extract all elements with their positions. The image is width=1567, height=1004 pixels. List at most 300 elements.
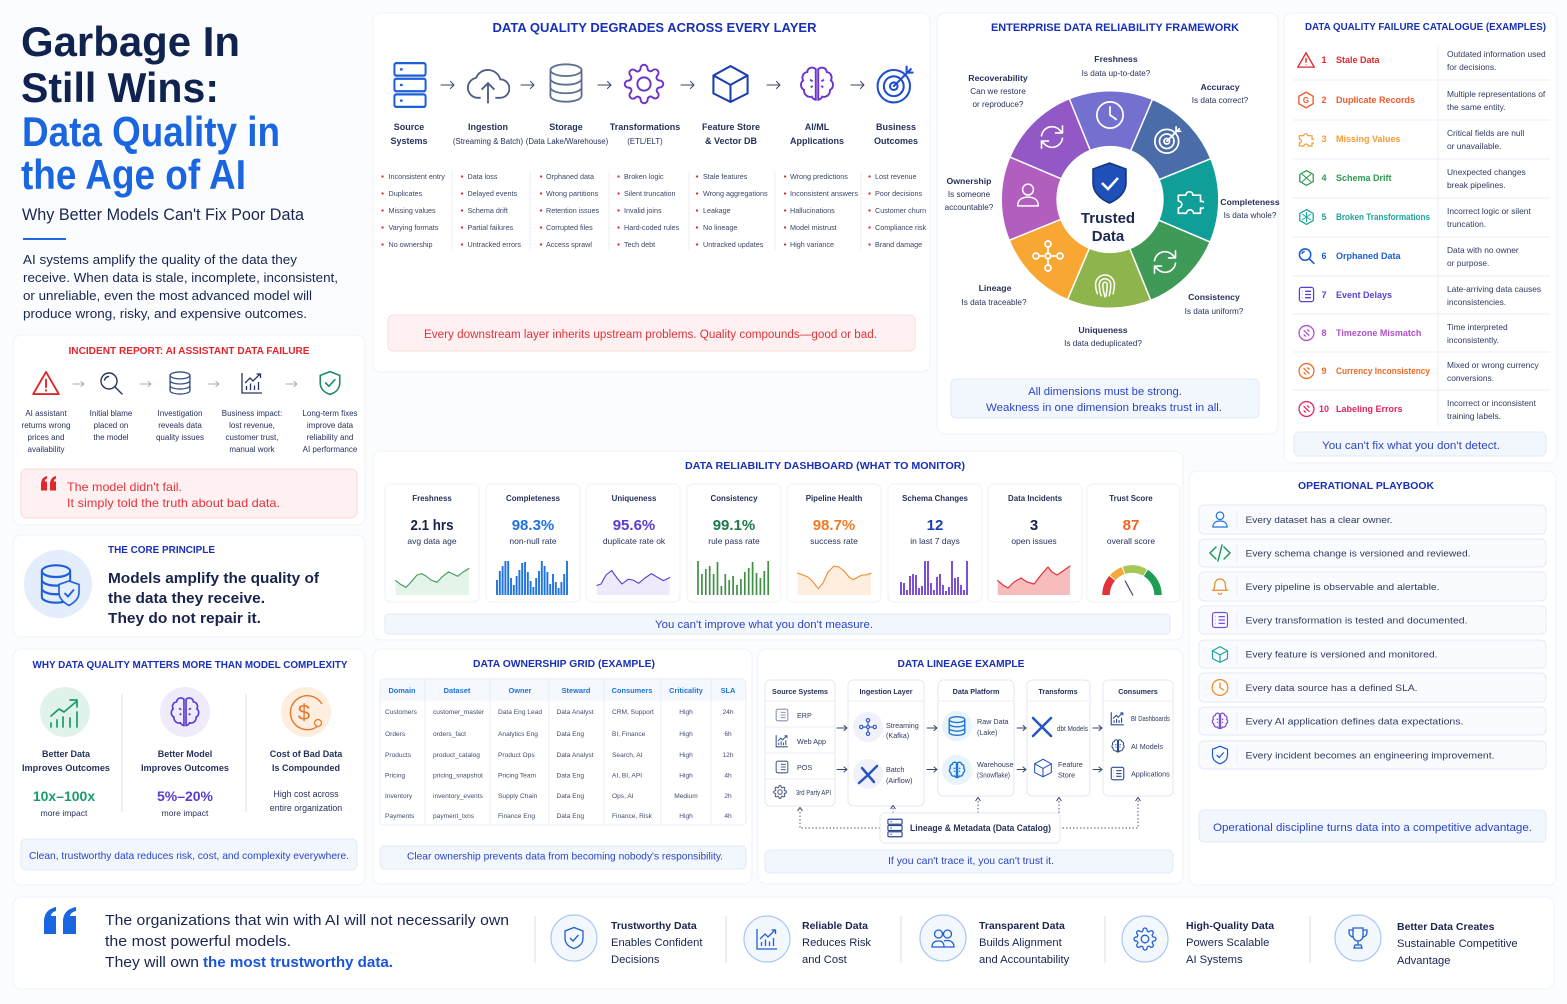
- wheel: [1001, 91, 1219, 308]
- callout: [388, 315, 915, 351]
- callout: quote: It simply told the truth about bad data.: [67, 496, 280, 510]
- column: ingestion layer: (Airflow): [886, 776, 912, 785]
- column: better model: Better Model: [158, 749, 212, 759]
- column: source systems: Web App: [797, 737, 826, 746]
- dimension labels: Is data correct?: [1192, 96, 1249, 105]
- layer labels: Business: [876, 122, 916, 132]
- table: Data Eng: [556, 731, 584, 738]
- row: owner: [1199, 505, 1546, 534]
- layer labels: Systems: [390, 136, 428, 146]
- list: AI/ML issues: High variance: [790, 240, 834, 249]
- KPI: freshness: [385, 484, 479, 602]
- table: Criticality: [669, 686, 704, 695]
- callout: [951, 379, 1259, 418]
- table: Pricing: [385, 772, 405, 780]
- column: better model: 5%–20%: [157, 788, 214, 804]
- step captions: reveals data: [158, 421, 202, 430]
- dimension labels: Freshness: [1094, 54, 1138, 64]
- step captions: [22, 409, 358, 454]
- column: data platform: Data Platform: [953, 687, 999, 696]
- step captions: returns wrong: [22, 421, 70, 430]
- table: High: [679, 813, 693, 820]
- column: better data: more impact: [41, 808, 88, 818]
- step captions: the model: [93, 433, 129, 442]
- heading: DATA LINEAGE EXAMPLE: [898, 658, 1024, 670]
- table: Data Eng: [556, 813, 584, 820]
- row 5: broken transformations: Broken Transformations: [1336, 212, 1430, 222]
- step captions: reliability and: [307, 433, 353, 442]
- column: better data: [22, 687, 110, 818]
- column: cost of bad data: [270, 687, 343, 813]
- KPI: uniqueness: 95.6%: [613, 517, 655, 534]
- takeaway: better data creates advantage: [1335, 915, 1518, 967]
- panel: data reliability dashboard: [373, 451, 1183, 640]
- KPI: consistency: rule pass rate: [708, 536, 760, 546]
- takeaway: reliable data: Reliable Data: [802, 920, 868, 932]
- takeaway: better data creates advantage: Sustainable Competitive: [1397, 938, 1518, 950]
- row 8: timezone mismatch: Time interpreted: [1447, 322, 1508, 332]
- KPI: schema changes: Schema Changes: [902, 494, 969, 503]
- heading: INCIDENT REPORT: AI ASSISTANT DATA FAILURE: [68, 345, 310, 357]
- catalog box: [880, 813, 1060, 843]
- column: ingestion layer: Ingestion Layer: [859, 687, 913, 696]
- row: AI application: Every AI application defines data expectations.: [1246, 716, 1464, 728]
- heading: WHY DATA QUALITY MATTERS MORE THAN MODEL COMPLEXITY: [32, 659, 348, 671]
- row: SLA: [1199, 673, 1546, 702]
- step captions: improve data: [307, 421, 354, 430]
- column: cost of bad data: $: [298, 700, 310, 725]
- table: Product Ops: [498, 752, 535, 759]
- list: storage issues: Retention issues: [546, 206, 600, 215]
- list: source issues: Duplicates: [388, 189, 422, 198]
- flow arrows: [837, 726, 1102, 772]
- KPI: schema changes: in last 7 days: [910, 536, 960, 546]
- layer labels: Transformations: [610, 122, 680, 132]
- heading: OPERATIONAL PLAYBOOK: [1298, 480, 1434, 492]
- row: pipeline: Every pipeline is observable and alertable.: [1246, 582, 1440, 593]
- KPI: freshness: 2.1 hrs: [410, 517, 454, 534]
- dimension labels: Uniqueness: [1078, 325, 1128, 335]
- row 3: missing values: 3: [1321, 134, 1327, 144]
- heading: DATA RELIABILITY DASHBOARD (WHAT TO MONITOR): [685, 460, 965, 472]
- table: 12h: [722, 752, 734, 759]
- KPI: data incidents: [988, 484, 1082, 602]
- list: transformation issues: [618, 172, 680, 249]
- dimension labels: Consistency: [1188, 292, 1240, 302]
- icon: warning: [33, 372, 59, 394]
- callout: Every downstream layer inherits upstream problems. Quality compounds—good or bad.: [424, 329, 877, 341]
- column: cost of bad data: Cost of Bad Data: [270, 749, 343, 759]
- takeaway: trustworthy data: Trustworthy Data: [611, 920, 697, 932]
- row 7: event delays: Late-arriving data causes: [1447, 284, 1541, 294]
- panel: closing banner: [13, 897, 1554, 989]
- closing quote: [105, 912, 509, 971]
- column: data platform: (Snowflake): [977, 770, 1010, 780]
- dimension labels: Can we restore: [970, 87, 1026, 96]
- list: ingestion issues: Data loss: [468, 172, 498, 181]
- row 6: orphaned data: 6: [1321, 251, 1327, 261]
- column: source systems: 3rd Party API: [796, 788, 831, 797]
- table: Payments: [385, 813, 415, 820]
- closing quote: the most trustworthy data.: [203, 954, 393, 971]
- row: transformation: [1199, 606, 1546, 634]
- list: ingestion issues: Untracked errors: [468, 240, 521, 249]
- layer labels: (ETL/ELT): [627, 137, 663, 146]
- column: source systems: Source Systems: [772, 687, 828, 696]
- icon: feature store cube: [713, 66, 748, 103]
- takeaway: reliable data: [744, 916, 871, 966]
- callout: Clean, trustworthy data reduces risk, cost, and complexity everywhere.: [29, 851, 349, 862]
- list: transformation issues: Silent truncation: [624, 189, 676, 198]
- column: cost of bad data: Is Compounded: [272, 763, 340, 773]
- row 1: stale data: Stale Data: [1336, 55, 1381, 65]
- row 7: event delays: inconsistencies.: [1447, 297, 1506, 307]
- row: SLA: Every data source has a defined SLA.: [1246, 683, 1418, 694]
- column: source systems: ERP: [797, 711, 812, 720]
- step captions: Long-term fixes: [302, 409, 358, 418]
- list: feature store issues: Stale features: [703, 172, 748, 181]
- KPI: consistency: Consistency: [711, 494, 758, 503]
- column: transforms: Feature: [1058, 760, 1083, 769]
- takeaway: trustworthy data: Enables Confident: [611, 937, 703, 949]
- panel: enterprise data reliability framework: [937, 13, 1280, 434]
- callout: quote: [21, 469, 357, 518]
- table: High: [679, 709, 693, 716]
- dimension labels: or reproduce?: [973, 100, 1024, 109]
- takeaway: transparent data: and Accountability: [979, 954, 1070, 966]
- column: cost of bad data: entire organization: [270, 803, 342, 813]
- list: source issues: Missing values: [388, 206, 436, 215]
- row 7: event delays: 7: [1321, 290, 1327, 300]
- row 7: event delays: Event Delays: [1336, 290, 1392, 300]
- row: schema: [1199, 539, 1546, 567]
- row 4: schema drift: 4: [1321, 173, 1327, 183]
- principle statement: the data they receive.: [108, 590, 265, 607]
- step captions: manual work: [229, 445, 276, 454]
- table: payment_txns: [433, 813, 475, 820]
- KPI: schema changes: [888, 484, 982, 602]
- icon: storage: [550, 64, 582, 102]
- KPI: consistency: 99.1%: [713, 517, 755, 534]
- row: incident: [1199, 741, 1546, 769]
- row 10: labeling errors: Incorrect or inconsistent: [1447, 398, 1537, 408]
- KPI: completeness: [486, 484, 580, 602]
- step captions: placed on: [94, 421, 128, 430]
- takeaway: high-quality data: AI Systems: [1186, 954, 1243, 966]
- table: pricing_snapshot: [433, 772, 483, 780]
- table: Consumers: [612, 686, 652, 695]
- table: Pricing Team: [498, 772, 536, 780]
- KPI: uniqueness: [586, 484, 680, 602]
- table: High: [679, 772, 693, 780]
- closing quote: the most powerful models.: [105, 933, 291, 950]
- row: pipeline: [1199, 572, 1546, 601]
- list: ingestion issues: Partial failures: [468, 223, 513, 232]
- closing quote: They will own: [105, 954, 199, 971]
- table: [380, 679, 746, 825]
- row 1: stale data: [1298, 49, 1546, 72]
- arrows: [441, 82, 864, 88]
- takeaway: high-quality data: [1122, 916, 1274, 966]
- row 2: duplicate records: G: [1303, 96, 1309, 105]
- column: consumers: [1103, 680, 1173, 796]
- intro paragraph: or unreliable, even the most advanced model will: [23, 288, 312, 303]
- row 6: orphaned data: or purpose.: [1447, 258, 1489, 268]
- takeaway: high-quality data: Powers Scalable: [1186, 937, 1269, 949]
- row 10: labeling errors: 10: [1319, 404, 1329, 414]
- row: feature: [1199, 640, 1546, 668]
- column: transforms: dbt Models: [1057, 724, 1088, 733]
- principle statement: [108, 570, 320, 627]
- callout: [765, 850, 1173, 873]
- wheel icons: [1018, 102, 1205, 297]
- KPI: trust score with gauge: overall score: [1107, 536, 1155, 546]
- step captions: prices and: [28, 433, 64, 442]
- arrows: [73, 382, 297, 386]
- list: AI/ML issues: Wrong predictions: [790, 172, 848, 181]
- KPI: data incidents: Data Incidents: [1008, 494, 1063, 503]
- panel: why data quality matters: [13, 649, 365, 885]
- column: better model: [141, 687, 229, 818]
- column: consumers: AI Models: [1131, 742, 1163, 751]
- row 8: timezone mismatch: inconsistently.: [1447, 335, 1499, 345]
- list: storage issues: [541, 172, 600, 249]
- callout: [385, 614, 1170, 634]
- layer labels: Outcomes: [874, 136, 918, 146]
- layer labels: (Streaming & Batch): [453, 137, 524, 146]
- row 8: timezone mismatch: Timezone Mismatch: [1336, 328, 1421, 338]
- KPI: consistency: [687, 484, 781, 602]
- list: storage issues: Wrong partitions: [546, 189, 599, 198]
- row 9: currency inconsistency: 9: [1321, 366, 1327, 376]
- row 3: missing values: [1299, 128, 1524, 151]
- row: owner: Every dataset has a clear owner.: [1246, 515, 1392, 526]
- list: transformation issues: Tech debt: [624, 240, 655, 249]
- table: Analytics Eng: [498, 731, 538, 738]
- list: feature store issues: No lineage: [703, 223, 737, 232]
- layer labels: & Vector DB: [705, 136, 758, 146]
- table: product_catalog: [433, 752, 480, 759]
- column: better model: Improves Outcomes: [141, 763, 229, 773]
- KPI: pipeline health: 98.7%: [813, 517, 855, 534]
- takeaway: reliable data: and Cost: [802, 954, 848, 966]
- row: AI application: [1199, 707, 1546, 735]
- callout: Clear ownership prevents data from becoming nobody's responsibility.: [407, 852, 723, 862]
- row 5: broken transformations: 5: [1321, 212, 1327, 222]
- table: Data Eng Lead: [498, 709, 542, 716]
- KPI: pipeline health: [787, 484, 881, 602]
- row 9: currency inconsistency: conversions.: [1447, 373, 1494, 383]
- header: title block: [21, 18, 338, 321]
- row 2: duplicate records: 2: [1321, 95, 1327, 105]
- icon: magnifier: [101, 373, 122, 394]
- KPI: pipeline health: Pipeline Health: [806, 494, 862, 503]
- panel: incident report: [13, 335, 365, 525]
- row 4: schema drift: Unexpected changes: [1447, 167, 1526, 177]
- row 1: stale data: 1: [1321, 55, 1327, 65]
- callout: Weakness in one dimension breaks trust in all.: [986, 402, 1222, 414]
- row 2: duplicate records: [1299, 89, 1546, 112]
- dimension labels: [945, 54, 1280, 348]
- main title: the Age of AI: [21, 151, 246, 198]
- row 3: missing values: or unavailable.: [1447, 141, 1501, 151]
- column: transforms: [1027, 680, 1090, 796]
- layer labels: Storage: [549, 122, 583, 132]
- layer labels: (Data Lake/Warehouse): [526, 137, 609, 146]
- column: consumers: Applications: [1131, 770, 1170, 778]
- table: Data Analyst: [556, 709, 594, 716]
- row 4: schema drift: break pipelines.: [1447, 180, 1506, 190]
- dimension labels: Is data up-to-date?: [1082, 69, 1151, 78]
- row 4: schema drift: [1300, 167, 1526, 190]
- column: ingestion layer: Batch: [886, 765, 904, 774]
- row 1: stale data: for decisions.: [1447, 62, 1496, 72]
- dotted lineage connectors: [798, 798, 1140, 828]
- list: transformation issues: Hard-coded rules: [624, 223, 680, 232]
- center: trusted data: Data: [1092, 228, 1125, 245]
- table: orders_fact: [433, 731, 466, 738]
- column: data platform: Warehouse: [977, 760, 1014, 769]
- heading: DATA QUALITY DEGRADES ACROSS EVERY LAYER: [492, 21, 816, 35]
- step captions: Business impact:: [222, 409, 282, 418]
- list: feature store issues: Untracked updates: [703, 240, 764, 249]
- takeaway: transparent data: [920, 915, 1070, 966]
- step captions: Initial blame: [90, 409, 133, 418]
- icon: transformations gear: [625, 65, 663, 103]
- step captions: lost revenue,: [229, 421, 275, 430]
- table: Orders: [385, 731, 406, 738]
- dimension labels: accountable?: [945, 203, 994, 212]
- principle statement: Models amplify the quality of: [108, 570, 320, 587]
- KPI: trust score with gauge: 87: [1123, 517, 1139, 534]
- KPI: completeness: 98.3%: [512, 517, 554, 534]
- column: source systems: [765, 680, 835, 806]
- table: Owner: [508, 686, 532, 695]
- column: better data: 10x–100x: [33, 788, 95, 804]
- step captions: AI assistant: [25, 409, 67, 418]
- list: AI/ML issues: Model mistrust: [790, 223, 837, 232]
- row 2: duplicate records: Duplicate Records: [1336, 95, 1415, 105]
- icon: ingestion cloud: [468, 70, 509, 103]
- icon: database with shield: [24, 550, 92, 618]
- takeaway: better data creates advantage: Better Data Creates: [1397, 921, 1495, 933]
- step captions: Investigation: [158, 409, 202, 418]
- column: ingestion layer: Streaming: [886, 721, 919, 730]
- callout: Operational discipline turns data into a competitive advantage.: [1213, 822, 1532, 834]
- table: High: [679, 752, 693, 759]
- KPI: freshness: avg data age: [407, 536, 457, 546]
- row 9: currency inconsistency: [1299, 360, 1540, 383]
- layer labels: AI/ML: [805, 122, 830, 132]
- list: business outcomes: Poor decisions: [875, 189, 923, 198]
- row 3: missing values: Critical fields are null: [1447, 128, 1524, 138]
- takeaway: transparent data: Transparent Data: [979, 920, 1065, 932]
- panel: data ownership grid: [373, 649, 752, 884]
- list: business outcomes: Lost revenue: [875, 172, 917, 181]
- table: customer_master: [433, 709, 485, 716]
- table: 24h: [722, 709, 734, 716]
- closing quote: The organizations that win with AI will not necessarily own: [105, 912, 509, 929]
- row 4: schema drift: Schema Drift: [1336, 173, 1392, 183]
- row 10: labeling errors: training labels.: [1447, 411, 1501, 421]
- catalog box: Lineage & Metadata (Data Catalog): [910, 823, 1051, 833]
- icon: impact chart: [242, 373, 262, 393]
- takeaway: trustworthy data: [551, 915, 703, 966]
- row 6: orphaned data: Orphaned Data: [1336, 251, 1402, 261]
- column: data platform: (Lake): [977, 728, 997, 737]
- takeaway: better data creates advantage: Advantage: [1397, 955, 1450, 967]
- callout: [1294, 432, 1546, 456]
- row 5: broken transformations: truncation.: [1447, 219, 1486, 229]
- table: Medium: [674, 793, 698, 800]
- icon: business target: [878, 67, 913, 102]
- column: transforms: Store: [1058, 770, 1075, 780]
- row 6: orphaned data: Data with no owner: [1447, 245, 1519, 255]
- row 8: timezone mismatch: 8: [1321, 328, 1327, 338]
- dimension labels: Is data deduplicated?: [1064, 339, 1142, 348]
- callout: [1199, 810, 1546, 842]
- table: inventory_events: [433, 793, 484, 800]
- table: Customers: [385, 709, 418, 716]
- table: Data Eng: [556, 772, 584, 780]
- list: source issues: No ownership: [388, 240, 432, 249]
- intro paragraph: AI systems amplify the quality of the data they: [23, 252, 297, 267]
- KPI: freshness: Freshness: [412, 494, 452, 503]
- table: Finance, Risk: [612, 813, 653, 820]
- list: feature store issues: [697, 172, 768, 249]
- row 5: broken transformations: Incorrect logic or silent: [1447, 206, 1531, 216]
- center: trusted data: Trusted: [1081, 210, 1135, 227]
- table: Products: [385, 752, 412, 759]
- KPI: trust score with gauge: Trust Score: [1109, 494, 1153, 503]
- callout: You can't improve what you don't measure.: [655, 619, 873, 631]
- takeaway: high-quality data: High-Quality Data: [1186, 920, 1274, 932]
- list: AI/ML issues: Inconsistent answers: [790, 189, 858, 198]
- KPI: pipeline health: success rate: [810, 536, 858, 546]
- subtitle: Why Better Models Can't Fix Poor Data: [22, 206, 305, 224]
- KPI: uniqueness: duplicate rate ok: [603, 536, 666, 546]
- step captions: customer trust,: [226, 433, 278, 442]
- column: ingestion layer: (Kafka): [886, 731, 909, 740]
- KPI: completeness: non-null rate: [509, 536, 557, 546]
- center: trusted data: [1081, 163, 1135, 245]
- callout: You can't fix what you don't detect.: [1322, 440, 1500, 452]
- column: source systems: POS: [797, 763, 812, 772]
- list: storage issues: Access sprawl: [546, 240, 592, 249]
- list: transformation issues: Broken logic: [624, 172, 664, 181]
- dimension labels: Completeness: [1220, 197, 1280, 207]
- main title: Garbage In: [21, 18, 240, 65]
- list: business outcomes: Compliance risk: [875, 223, 927, 232]
- list: source issues: [382, 172, 445, 249]
- heading: ENTERPRISE DATA RELIABILITY FRAMEWORK: [991, 22, 1239, 34]
- panel: core principle: [13, 535, 365, 637]
- table: Domain: [388, 686, 416, 695]
- table: BI, Finance: [612, 731, 646, 738]
- row 7: event delays: [1299, 284, 1541, 307]
- heading: DATA OWNERSHIP GRID (EXAMPLE): [473, 658, 655, 670]
- icon: source systems: [394, 63, 426, 107]
- dimension labels: Ownership: [947, 176, 991, 186]
- column: cost of bad data: High cost across: [273, 789, 339, 799]
- table: 4h: [724, 813, 732, 820]
- list: source issues: Varying formats: [388, 223, 439, 232]
- list: storage issues: Corrupted files: [546, 223, 593, 232]
- list: AI/ML issues: [785, 172, 858, 249]
- list: source issues: Inconsistent entry: [388, 172, 445, 181]
- column: consumers: Consumers: [1118, 687, 1158, 696]
- KPI: data incidents: open issues: [1011, 536, 1057, 546]
